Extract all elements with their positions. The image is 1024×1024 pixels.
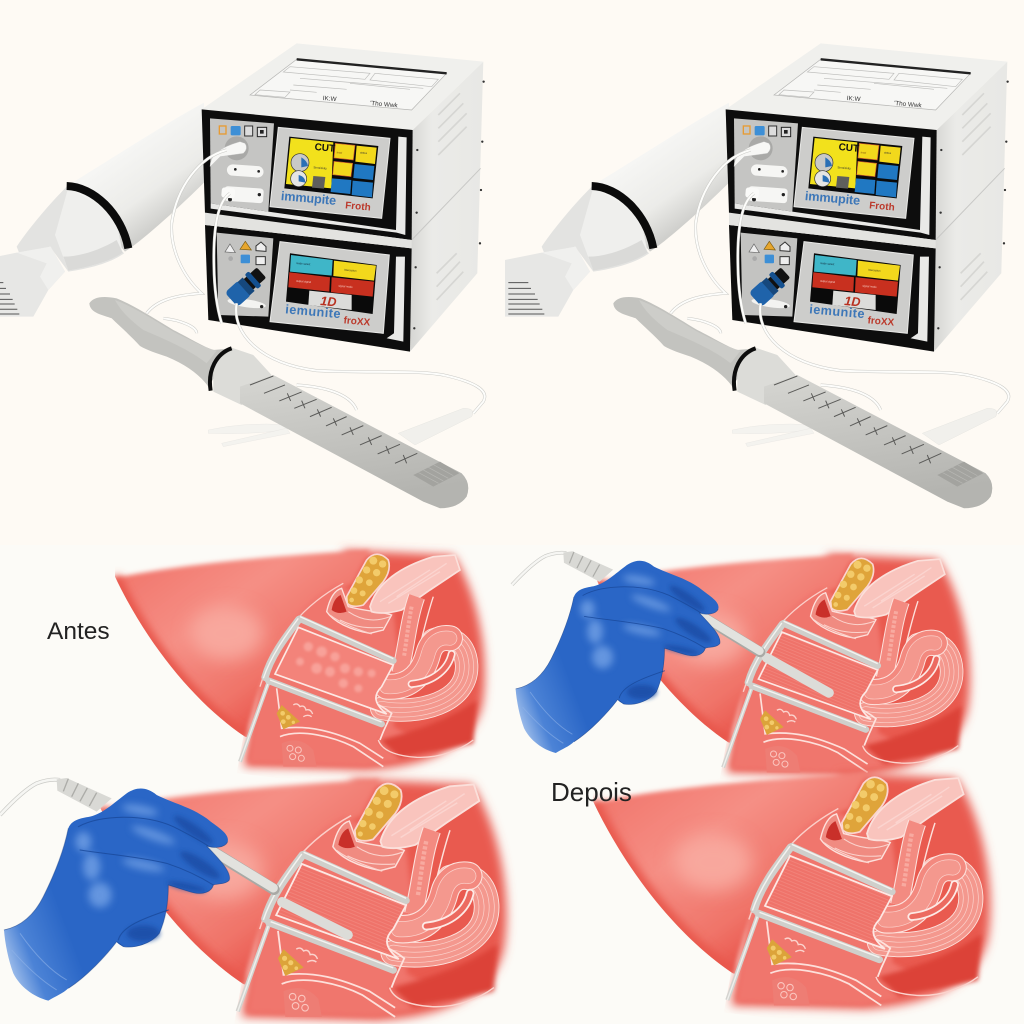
stacked device right: 1D [844,294,861,309]
stacked device right: 'Tho Wwk [894,100,923,109]
cavity with textured lining [275,627,393,714]
stacked device left: froXX [343,315,371,329]
hand with probe, bottom left [0,778,274,1001]
cables right [671,150,1009,413]
stacked device right: mode select [820,261,835,266]
stacked device left: Froth [345,200,371,214]
stacked device left: 1D [320,294,337,309]
stacked device right: output signal [820,279,836,284]
stacked device right: level [861,150,867,155]
stacked device left: level [337,150,343,155]
grey probe left [89,297,468,508]
stacked device left: status [360,150,368,155]
cavity smooth lining [758,632,878,719]
pale accessory probes right [732,408,997,447]
stacked device left: iemunite [285,302,342,321]
cavity smooth lining [276,864,406,959]
stacked device right: iemunite [809,302,866,321]
stacked device left: 'Tho Wwk [370,100,399,109]
stacked device right: signal mode [862,284,877,289]
stacked device right: immupite [804,189,862,208]
stacked device left: mode select [296,261,311,266]
hand with probe, top right [512,551,760,753]
stacked device left: IK:W [322,95,337,103]
stacked device right: IK:W [846,95,861,103]
stacked device right: CUT [838,142,859,155]
handpiece right [505,103,732,317]
panel: anatomy with probe, top right [595,554,970,776]
stacked device right: Sensitivity [837,165,851,171]
panel: anatomy after [591,773,990,1009]
inserted probe [767,658,829,693]
grey probe right [613,297,992,508]
stacked device left: CUT [314,142,335,155]
pale accessory probes left [208,408,473,447]
handpiece left [0,103,207,317]
stacked device left: output signal [296,279,312,284]
label: Antes: Antes [47,618,110,645]
stacked device right: Interaction [868,268,881,273]
cavity smooth lining [765,856,892,949]
stacked device left: signal mode [338,284,353,289]
stacked device left: Sensitivity [313,165,327,171]
stacked device left [202,43,485,352]
panel: anatomy before [113,550,485,770]
panel: device set right [505,43,1009,508]
stacked device right: froXX [867,315,895,329]
stacked device right: status [884,150,892,155]
stacked device right: Froth [869,200,895,214]
stacked device left: Interaction [344,268,357,273]
stacked device right [726,43,1009,352]
inserted probe [282,902,348,935]
panel: device set left [0,43,485,508]
cables left [147,150,485,413]
label: Depois: Depois [551,777,632,807]
stacked device left: immupite [280,189,338,208]
panel: anatomy with probe, bottom left [99,779,507,1021]
